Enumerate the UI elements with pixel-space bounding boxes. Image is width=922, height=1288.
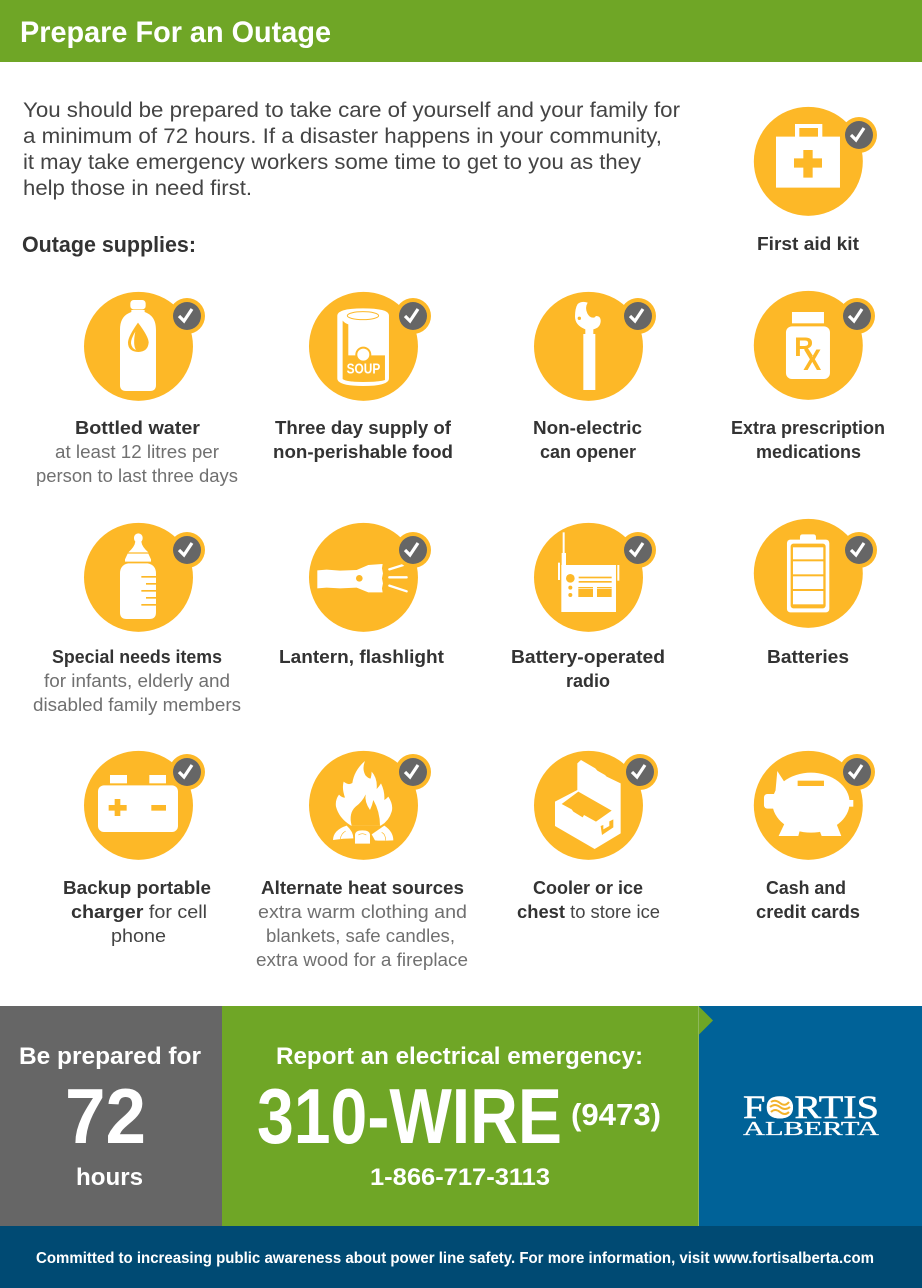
footer bar: Committed to increasing public awareness about power line safety. For more information, visit www.fortisalberta.com: [36, 1250, 874, 1267]
label: food supply: non-perishable food: [273, 441, 453, 462]
panel: lantern, flashlight: [279, 523, 444, 667]
icon: car battery: [84, 751, 193, 860]
panel: report an electrical emergency: 310-WIRE: [257, 1072, 562, 1160]
icon: soup can: SOUP: [347, 362, 380, 378]
panel: first aid kit: [754, 107, 877, 254]
label: can opener: can opener: [540, 441, 636, 462]
icon: cooler: [534, 751, 643, 860]
check badge: [169, 298, 205, 334]
label: prescription medications: Extra prescription: [731, 417, 885, 438]
label: portable charger: Backup portable: [63, 877, 211, 898]
header banner: Prepare For an Outage: [20, 16, 331, 49]
icon: battery: [754, 519, 863, 628]
label: special needs items: for infants, elderly and: [44, 670, 230, 691]
check badge: [395, 532, 431, 568]
icon: baby bottle: [84, 523, 193, 632]
label: special needs items: disabled family members: [33, 694, 241, 715]
panel: portable charger: [63, 751, 211, 946]
panel: batteries: [754, 519, 877, 667]
panel: alternate heat sources: [256, 751, 468, 970]
icon: water bottle: [84, 292, 193, 401]
intro text block: You should be prepared to take care of yourself and your family for: [23, 98, 680, 122]
icon: prescription bottle: [754, 291, 863, 400]
check badge: [620, 532, 656, 568]
check badge: [622, 754, 658, 790]
label: battery-operated radio: [511, 646, 665, 691]
panel: food supply: [273, 292, 453, 462]
icon: piggy bank: [754, 751, 863, 860]
panel: prescription medications: [731, 291, 885, 462]
intro text block: it may take emergency workers some time to get to you as they: [23, 150, 641, 174]
icon: prescription bottle: X: [803, 344, 821, 377]
icon: can opener: [534, 292, 643, 401]
heading: outage supplies: Outage supplies:: [22, 232, 196, 257]
panel: report an electrical emergency: (9473): [571, 1097, 661, 1132]
label: alternate heat sources: blankets, safe candles,: [266, 925, 455, 946]
label: special needs items: Special needs items: [52, 646, 222, 667]
check badge: [841, 117, 877, 153]
label: batteries: Batteries: [767, 646, 849, 667]
label: alternate heat sources: extra warm clothing and: [258, 901, 467, 922]
label: cash and credit cards: [756, 877, 860, 922]
intro text block: help those in need first.: [23, 176, 252, 200]
label: bottled water: [36, 417, 238, 486]
panel: report an electrical emergency: 1-866-717-3113: [370, 1164, 550, 1191]
label: prescription medications: [731, 417, 885, 462]
label: alternate heat sources: extra wood for a fireplace: [256, 949, 468, 970]
icon: radio: [534, 523, 643, 632]
panel: Fortis Alberta logo: ALBERTA: [743, 1118, 880, 1140]
label: bottled water: person to last three days: [36, 465, 238, 486]
check badge: [395, 298, 431, 334]
check badge: [841, 532, 877, 568]
panel: bottled water: [36, 292, 238, 486]
panel: be prepared for 72 hours: 72: [65, 1072, 146, 1160]
icon: flashlight: [309, 523, 418, 632]
panel: be prepared for 72 hours: Be prepared for: [19, 1043, 201, 1070]
panel: Fortis Alberta logo: FORTIS: [743, 1090, 879, 1126]
label: portable charger: phone: [111, 925, 166, 946]
label: cash and credit cards: Cash and: [766, 877, 846, 898]
icon: first aid kit: [754, 107, 863, 216]
label: special needs items: [33, 646, 241, 715]
label: first aid kit: First aid kit: [757, 233, 859, 254]
panel: can opener: [533, 292, 656, 462]
icon: prescription bottle: R: [794, 332, 814, 362]
label: alternate heat sources: Alternate heat sources: [261, 877, 464, 898]
label: cooler: Cooler or ice: [533, 877, 643, 898]
intro text block: [23, 98, 680, 200]
label: battery-operated radio: radio: [566, 670, 610, 691]
check badge: [620, 298, 656, 334]
panel: special needs items: [33, 523, 241, 715]
label: portable charger: charger for cell: [71, 901, 207, 922]
panel: report an electrical emergency: Report an electrical emergency:: [276, 1043, 643, 1070]
check badge: [839, 298, 875, 334]
label: bottled water: at least 12 litres per: [55, 441, 219, 462]
label: cash and credit cards: credit cards: [756, 901, 860, 922]
label: bottled water: Bottled water: [75, 417, 200, 438]
panel: cooler: [517, 751, 660, 922]
label: can opener: Non-electric: [533, 417, 642, 438]
check badge: [395, 754, 431, 790]
label: food supply: [273, 417, 453, 462]
label: cooler: chest to store ice: [517, 901, 660, 922]
check badge: [169, 532, 205, 568]
panel: battery-operated radio: [511, 523, 665, 691]
panel: be prepared for 72 hours: [0, 1006, 222, 1226]
header banner: [0, 0, 922, 62]
intro text block: a minimum of 72 hours. If a disaster happens in your community,: [23, 124, 662, 148]
label: portable charger: [63, 877, 211, 946]
label: lantern, flashlight: Lantern, flashlight: [279, 646, 444, 667]
label: prescription medications: medications: [756, 441, 861, 462]
check badge: [839, 754, 875, 790]
label: can opener: [533, 417, 642, 462]
panel: report an electrical emergency: [222, 1006, 698, 1226]
icon: campfire: [309, 751, 418, 860]
label: alternate heat sources: [256, 877, 468, 970]
icon: soup can: [309, 292, 418, 401]
footer bar: [0, 1226, 922, 1288]
label: battery-operated radio: Battery-operated: [511, 646, 665, 667]
check badge: [169, 754, 205, 790]
panel: Fortis Alberta logo: [698, 1006, 922, 1226]
panel: cash and credit cards: [754, 751, 875, 922]
panel: be prepared for 72 hours: hours: [76, 1164, 143, 1191]
label: food supply: Three day supply of: [275, 417, 452, 438]
label: cooler: [517, 877, 660, 922]
